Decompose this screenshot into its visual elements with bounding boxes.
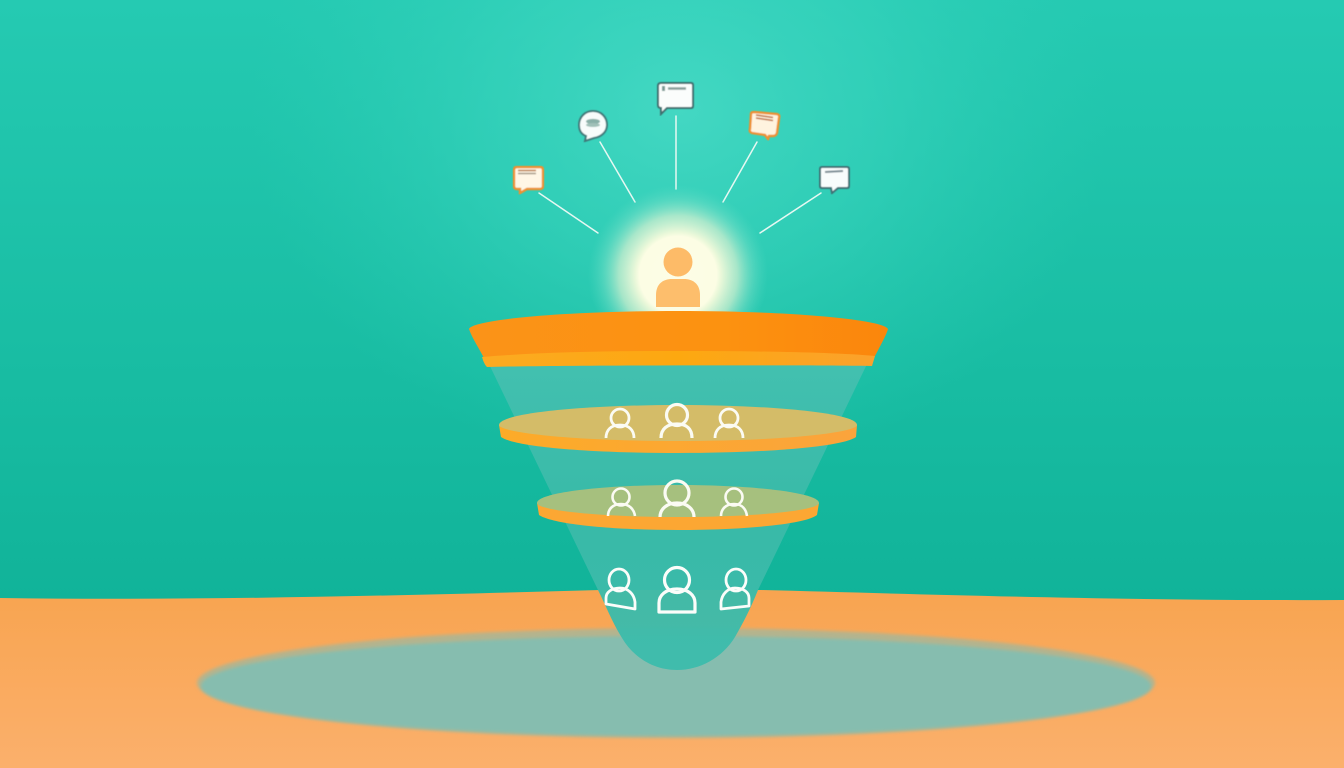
icon: person right xyxy=(721,569,749,609)
icon: top speech bubble xyxy=(658,83,693,114)
icon: person right xyxy=(715,409,743,438)
icon: central person xyxy=(656,248,700,307)
icon: person left xyxy=(606,409,634,438)
icon: orange speech bubble right xyxy=(750,112,779,139)
icon: person left xyxy=(608,488,635,516)
people in funnel base xyxy=(606,568,749,612)
icon: person right xyxy=(721,488,747,516)
funnel tier 2 disc xyxy=(499,405,857,453)
orange ground xyxy=(0,590,1344,768)
people on tier 3 xyxy=(608,481,747,517)
funnel top rim xyxy=(469,311,888,367)
icon: person centre xyxy=(659,568,695,612)
connector lines xyxy=(539,116,821,233)
icon: person centre xyxy=(660,481,694,517)
icon: orange speech bubble left xyxy=(514,167,543,193)
funnel body xyxy=(488,362,868,670)
glow halo xyxy=(588,185,768,365)
icon: person centre xyxy=(661,404,692,438)
icon: person left xyxy=(606,569,635,609)
icon: right speech bubble xyxy=(820,167,849,193)
floor shadow ellipse xyxy=(197,628,1155,738)
funnel tier 3 disc xyxy=(537,485,819,530)
people on tier 2 xyxy=(606,404,743,438)
icon: round speech bubble xyxy=(579,111,607,141)
